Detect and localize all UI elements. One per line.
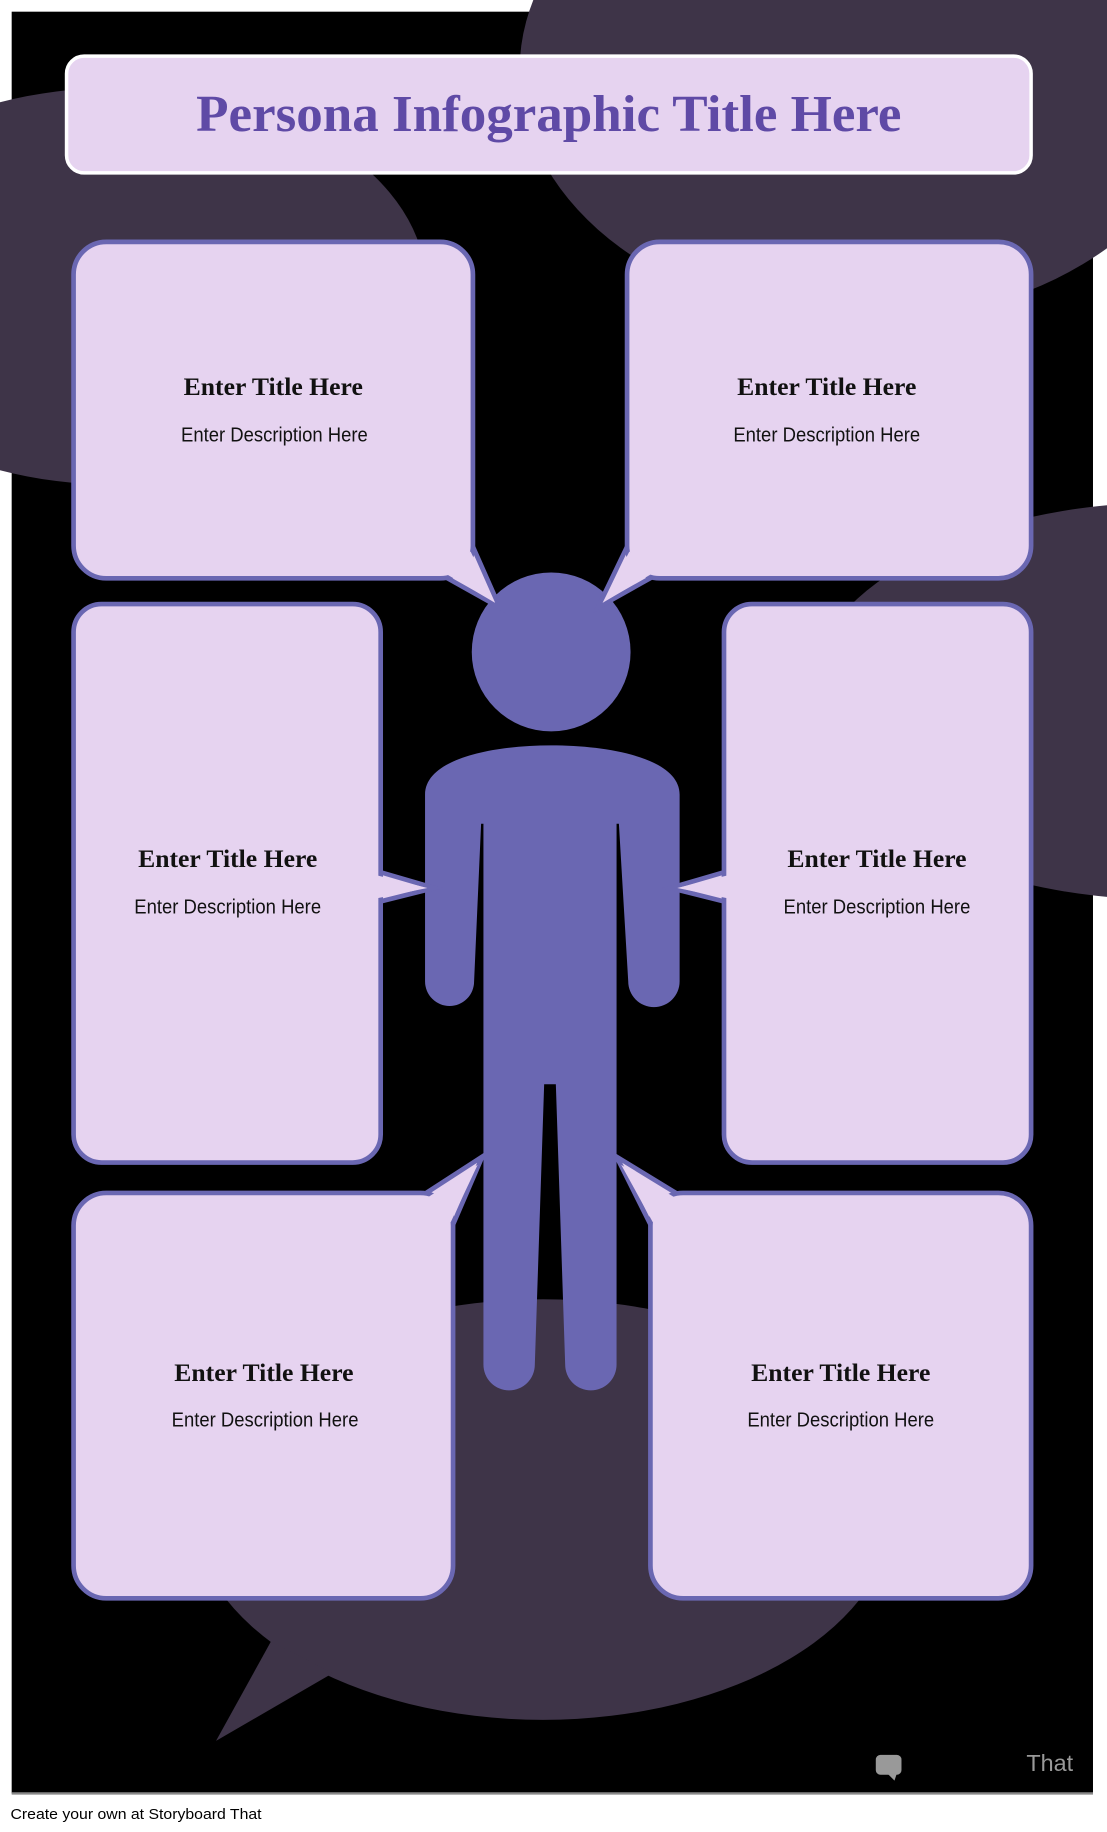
card: middle right (670, 604, 1031, 1163)
card: bottom right: Enter Title Here (751, 1358, 930, 1387)
card: top right: Enter Title Here (737, 372, 916, 401)
card: top left: Enter Description Here (181, 425, 368, 447)
card: bottom left: Enter Title Here (174, 1358, 354, 1387)
card: top right (598, 242, 1031, 608)
card: top right: Enter Description Here (733, 425, 920, 447)
card: bottom right: Enter Description Here (747, 1410, 934, 1432)
card: middle right: Enter Title Here (787, 844, 967, 873)
person figure (425, 572, 680, 1390)
watermark logo (876, 1750, 1074, 1781)
card: middle left (74, 604, 434, 1163)
card: bottom left (74, 1157, 482, 1598)
card: middle left: Enter Title Here (138, 844, 317, 873)
card: bottom left: Enter Description Here (172, 1410, 358, 1432)
card: middle left: Enter Description Here (134, 897, 321, 919)
title banner (67, 56, 1031, 173)
card: bottom right (617, 1157, 1031, 1598)
footer text: Create your own at Storyboard That (11, 1806, 262, 1823)
card: top left (74, 242, 500, 608)
card: top left: Enter Title Here (184, 372, 363, 401)
title banner: Persona Infographic Title Here (196, 86, 901, 143)
card: middle right: Enter Description Here (784, 897, 970, 919)
watermark logo: That (1026, 1750, 1074, 1776)
